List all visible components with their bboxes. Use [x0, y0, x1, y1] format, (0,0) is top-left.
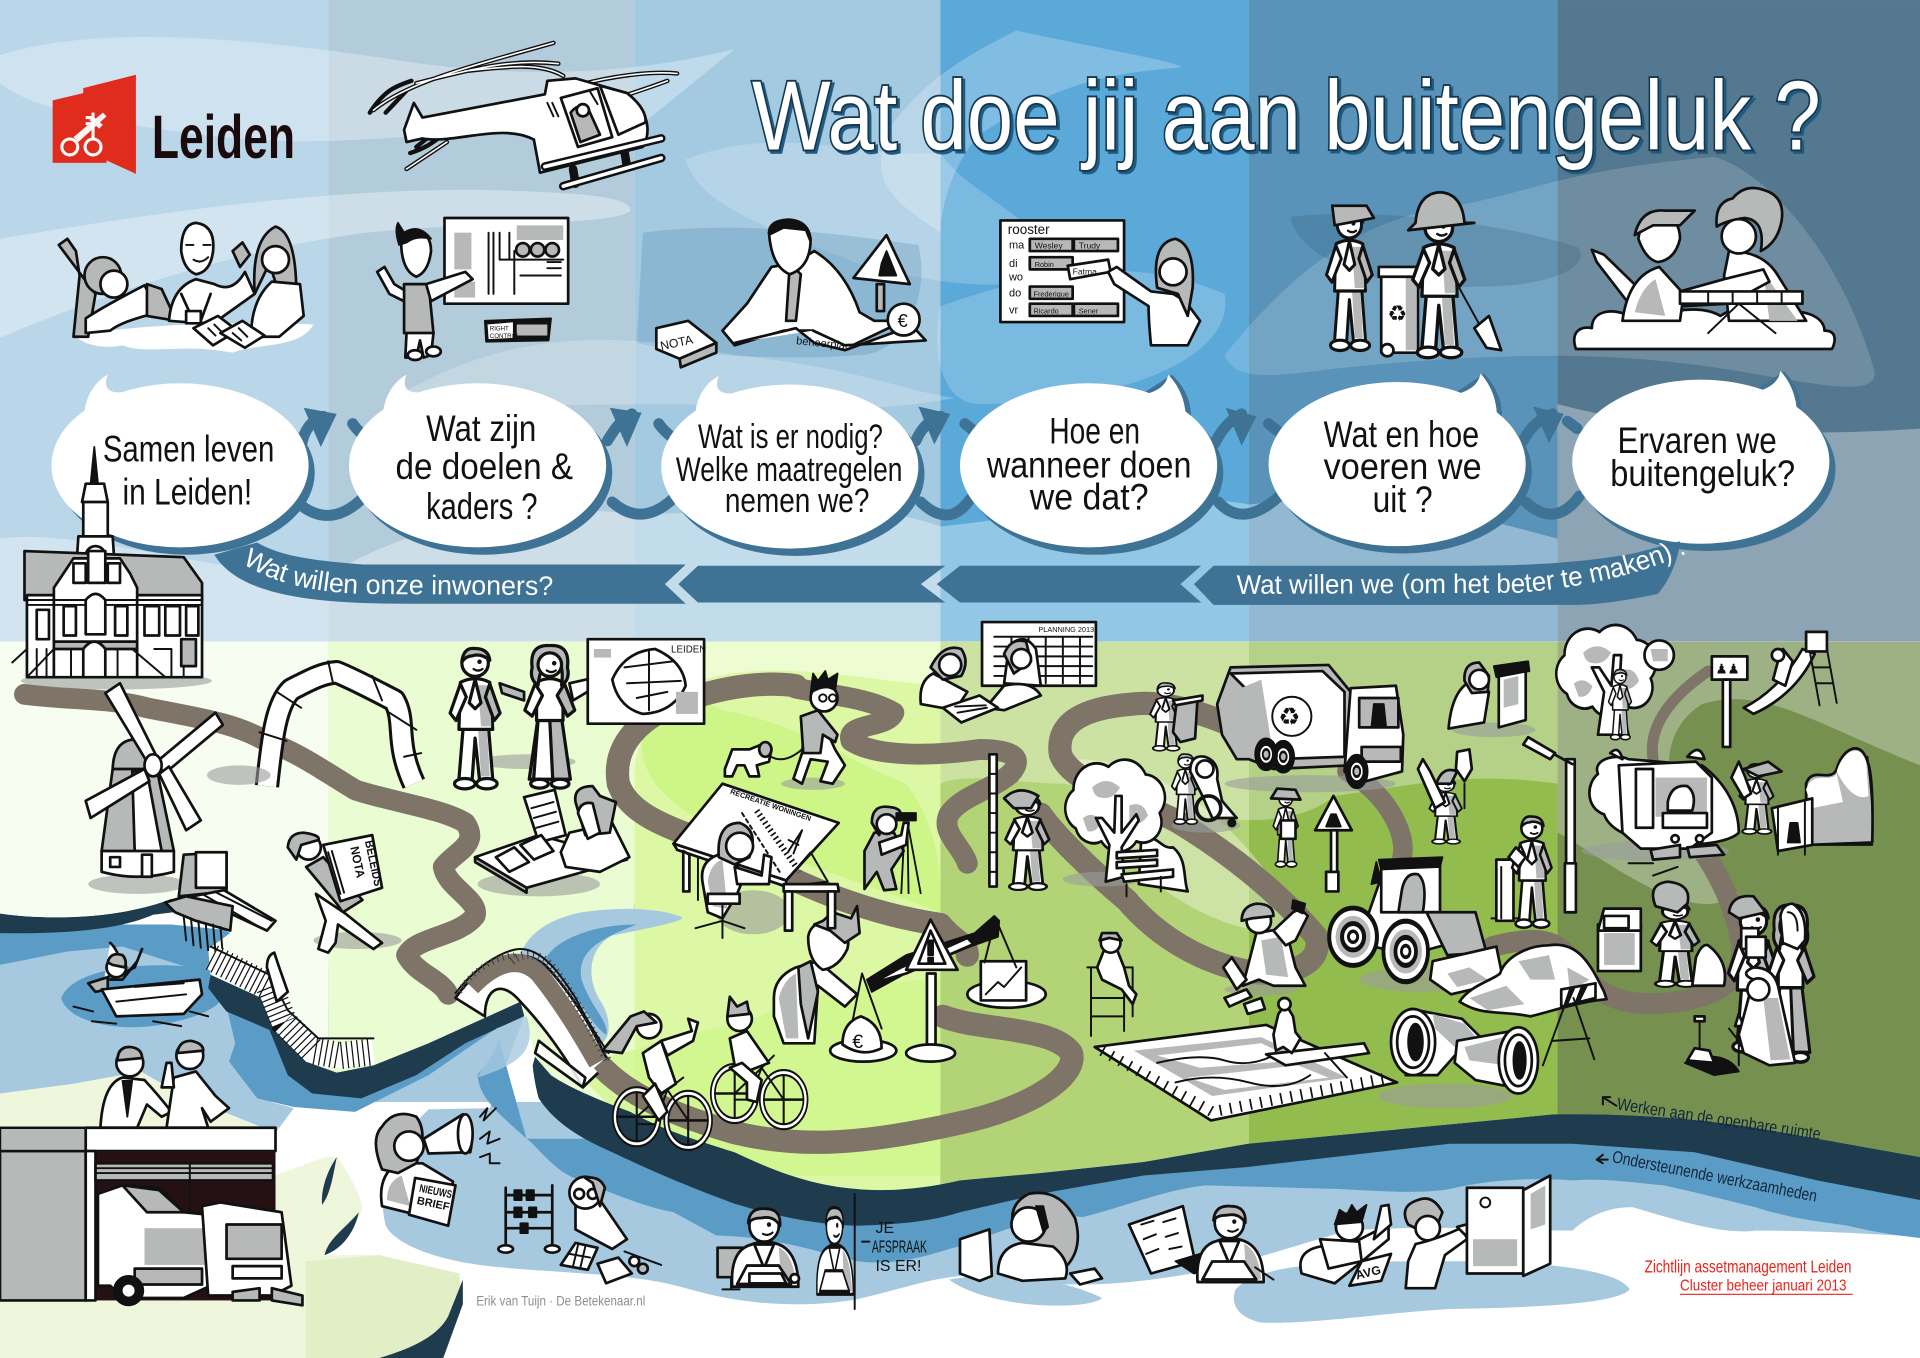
scene: designer at drafting table [673, 784, 839, 938]
icon: street sweeper [1582, 750, 1739, 876]
icon: playground sign: ♟♟ [1716, 661, 1740, 676]
icon: bridge [456, 949, 643, 1098]
scene: planner and schedule board [920, 622, 1096, 722]
scene: manager weighing risk and budget [774, 906, 1046, 1062]
note: supporting work: Ondersteunende werkzaamheden [1611, 1146, 1819, 1206]
icon: garbage truck: ♻ [1278, 704, 1300, 731]
bubble 4 [960, 375, 1223, 555]
scene: man behind wall with speech note [817, 1194, 927, 1309]
icon: windmill [86, 683, 223, 894]
scene: man with tablet screen [1129, 1206, 1273, 1282]
bubble 2: Wat zijn [426, 408, 536, 449]
scene: two residents with Leiden map: LEIDEN [671, 645, 706, 656]
scene: laptop helpdesk woman [960, 1193, 1102, 1285]
scene: man at desk with budget and plan: beheerplan [796, 335, 852, 353]
scene: lifeguard on tall chair [1087, 933, 1136, 1036]
icon: street lamp [1523, 737, 1576, 912]
bubble 6: Ervaren we [1618, 420, 1777, 461]
scene: rooster schedule board: Frederique [1033, 289, 1069, 298]
book [485, 318, 551, 342]
scene: woman with megaphone: BRIEF [416, 1195, 451, 1214]
icon: helicopter [370, 43, 677, 186]
scene: two men on roof [100, 1041, 229, 1128]
scene: two cyclists [602, 997, 806, 1147]
imprint: red note: Cluster beheer januari 2013 [1680, 1278, 1847, 1295]
icon: wheel loader [1329, 857, 1504, 994]
note: supporting work [1597, 1146, 1819, 1206]
bubble 1: Samen leven [103, 429, 274, 470]
icon: playground slide [1744, 632, 1837, 714]
icon: swimming pool [1095, 998, 1397, 1120]
bubble 6 [1572, 371, 1836, 551]
scene: woman with megaphone: NIEUWS [418, 1183, 453, 1201]
scene: man with AVG book: AVG [1354, 1263, 1382, 1283]
bubble 1: in Leiden! [122, 472, 252, 513]
scene: wheelchair [1172, 754, 1240, 833]
scene: planner and schedule board: PLANNING 2013 [1038, 625, 1094, 634]
scene: rooster schedule board: Trudy [1079, 241, 1101, 251]
scene: man at water post [1491, 816, 1552, 928]
scene: woman with megaphone [376, 1108, 500, 1226]
icon: pile of sand [1460, 945, 1607, 1016]
imprint: red note [1644, 1256, 1853, 1295]
scene: woman at waste terminal [1598, 882, 1725, 987]
scene: man behind wall with speech note: IS ER! [876, 1258, 921, 1275]
scene: rooster schedule board: ma [1009, 240, 1025, 252]
scene: woman at window with paper plane [1405, 1176, 1550, 1288]
scene: rooster schedule board: rooster [1008, 222, 1050, 237]
scene: rooster schedule board: Ricardo [1033, 306, 1059, 315]
sky background columns and clouds [0, 0, 1920, 642]
icon: fence along the river [211, 947, 373, 1056]
scene: man behind wall with speech note: JE [876, 1220, 894, 1237]
scene: two people at picnic table on cloud [1574, 188, 1835, 349]
bubble 2: de doelen & [396, 446, 573, 487]
logo: Leiden: Leiden [152, 103, 295, 171]
icon: road barrier [1543, 983, 1596, 1065]
scene: rooster schedule board: do [1009, 287, 1021, 299]
icon: playground sign [1712, 656, 1747, 747]
scene: rooster schedule board: Robin [1035, 260, 1054, 269]
icon: dam [165, 852, 276, 955]
bubble 3: Wat is er nodig? [698, 418, 883, 456]
scene: waving worker with sign [1418, 749, 1472, 844]
scene: man with AVG book [1300, 1205, 1391, 1286]
icon: underground waste container and bush [1772, 748, 1873, 855]
scene: two residents with Leiden map [450, 639, 706, 789]
scene: worker carrying policy note: BELEIDS [362, 839, 385, 887]
scene: worker carrying policy note: NOTA [347, 845, 368, 879]
scene: inspector with clipboard [1271, 789, 1300, 867]
speech bubbles and process connectors [51, 371, 1836, 556]
bubble 6: buitengeluk? [1610, 453, 1795, 494]
scene: man at desk with budget and plan: € [898, 310, 908, 331]
scene: citizens at table [59, 223, 313, 353]
icon: garage with vehicles [0, 1128, 302, 1305]
icon: roadworks sign [1315, 796, 1352, 891]
bubble 4: we dat? [1029, 476, 1149, 517]
scene: rooster schedule board: di [1009, 258, 1018, 270]
scene: person in rowing boat [73, 943, 208, 1026]
note: public space: Werken aan de openbare ruimte [1616, 1094, 1822, 1144]
water and lower ground [0, 642, 1920, 1358]
bubble 5: voeren we [1324, 446, 1482, 487]
scene: person planting tree [1685, 967, 1795, 1075]
roads [24, 671, 1742, 1142]
scene: colleague at computer [718, 1209, 799, 1289]
scene: designer at drafting table: RECREATIE WONINGEN [729, 787, 812, 823]
scene: bookkeeper with abacus [498, 1177, 661, 1283]
scene: residents with plants [1728, 896, 1814, 1062]
bubble 1 [51, 375, 315, 555]
scene: person with wheelie bin [1150, 683, 1202, 751]
scene: man at desk with budget and plan: NOTA [659, 332, 695, 353]
banner: questions ribbon: Wat willen onze inwoners? [246, 547, 552, 596]
scene: rooster schedule board: Fatma [1073, 266, 1097, 276]
bubble 3: Welke maatregelen [676, 451, 902, 489]
scene: worker inspecting container [1449, 661, 1536, 737]
scene: manager weighing risk and budget: € [852, 1031, 863, 1053]
scene: tree and bench [1063, 760, 1188, 896]
book: CONTROL [490, 333, 520, 340]
banner: questions ribbon: Wat willen we (om het beter te maken) . [1236, 543, 1685, 599]
stream under bridge [478, 909, 682, 1078]
banner: questions ribbon [214, 541, 1685, 605]
credit line: Erik van Tuijn · De Betekenaar.nl [476, 1293, 645, 1308]
land: coloured columns [0, 642, 1920, 1193]
scene: man walking dog [725, 671, 845, 790]
bubble 5 [1269, 373, 1532, 553]
icon: town hall [12, 447, 212, 689]
bubble 5: uit ? [1373, 479, 1433, 520]
bubble 2: kaders ? [426, 486, 538, 527]
book: RIGHT [490, 326, 509, 333]
scene: rooster schedule board: vr [1009, 304, 1018, 316]
scene: worker carrying policy note [288, 833, 402, 953]
scene: tree with person top right [1556, 625, 1674, 740]
scene: worker laying paving with hammer [1223, 900, 1308, 1014]
sculpture: arch [207, 661, 421, 786]
bubble 5: Wat en hoe [1324, 414, 1479, 455]
scene: man with measuring pole [989, 754, 1049, 890]
scene: person reading at desk [475, 786, 629, 896]
scene: rooster schedule board: Wesley [1035, 241, 1063, 251]
bubble 4: Hoe en [1049, 410, 1140, 451]
bubble 2 [349, 375, 612, 555]
imprint: red note: Zichtlijn assetmanagement Leiden [1644, 1256, 1851, 1276]
icon: garbage truck [1217, 665, 1403, 792]
icon: sewer pipes [1378, 1009, 1538, 1108]
bubble 4: wanneer doen [986, 445, 1191, 486]
logo: Leiden [53, 75, 295, 174]
scene: man behind wall with speech note: AFSPRAAK [872, 1237, 927, 1257]
bubble 3 [661, 376, 924, 556]
scene: worker with hat beside bush [1731, 762, 1782, 834]
scene: man at desk with budget and plan [656, 219, 926, 367]
scene: man pointing at map [377, 218, 568, 360]
bubble 3: nemen we? [725, 482, 869, 520]
scene: two workers and recycling bin: ♻ [1387, 301, 1407, 326]
scene: rooster schedule board: wo [1008, 271, 1023, 283]
scene: rooster schedule board: Sener [1079, 306, 1099, 315]
scene: land surveyor [864, 807, 921, 894]
scene: two workers and recycling bin [1326, 192, 1501, 358]
scene: rooster schedule board [1000, 220, 1200, 345]
